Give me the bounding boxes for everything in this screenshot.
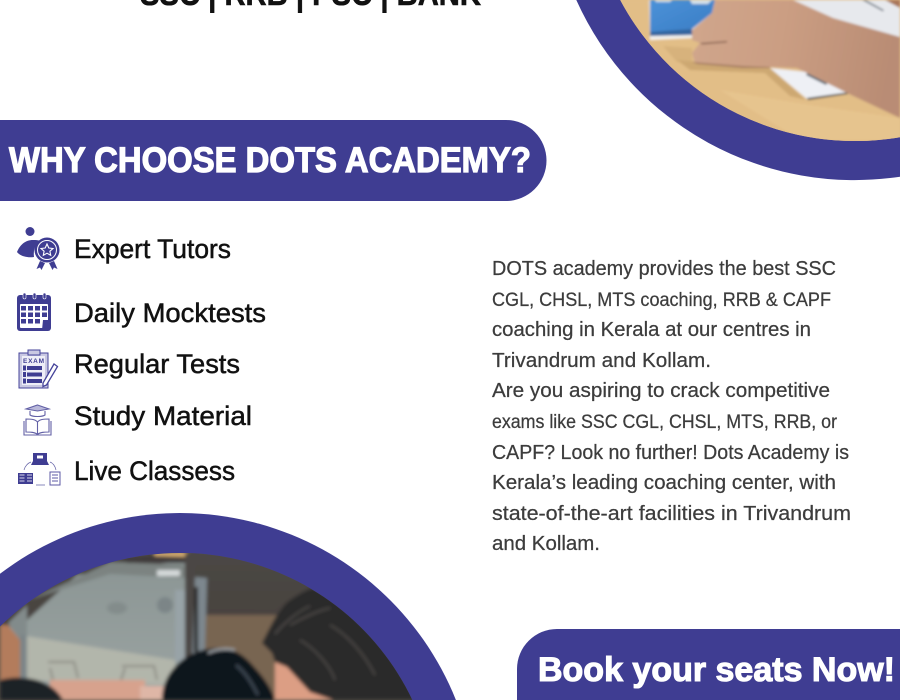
description paragraph: exams like SSC CGL, CHSL, MTS, RRB, or xyxy=(492,411,837,433)
description paragraph: DOTS academy provides the best SSC xyxy=(492,257,836,280)
icon: expert tutor badge xyxy=(17,227,60,270)
description paragraph: CAPF? Look no further! Dots Academy is xyxy=(492,441,849,464)
heading text: WHY CHOOSE DOTS ACADEMY? xyxy=(9,141,531,180)
description paragraph: coaching in Kerala at our centres in xyxy=(492,318,811,341)
label: Expert Tutors xyxy=(74,234,231,264)
description paragraph xyxy=(492,257,851,555)
icon: calendar xyxy=(17,293,51,331)
label: Daily Mocktests xyxy=(74,298,266,328)
description paragraph: Kerala’s leading coaching center, with xyxy=(492,471,836,494)
top-right circular photo with ring xyxy=(576,0,900,180)
description paragraph: and Kollam. xyxy=(492,532,600,555)
icon: exam sheet: EXAM xyxy=(23,358,44,365)
call to action button xyxy=(517,629,900,700)
icon: live classes network xyxy=(18,453,60,485)
description paragraph: Trivandrum and Kollam. xyxy=(492,349,711,372)
label: Study Material xyxy=(74,401,252,431)
description paragraph: state-of-the-art facilities in Trivandrum xyxy=(492,502,851,525)
description paragraph: Are you aspiring to crack competitive xyxy=(492,379,830,402)
icon: book and graduation cap xyxy=(24,405,51,435)
label: Live Classess xyxy=(74,456,235,486)
heading banner xyxy=(0,120,546,201)
bottom-left circular photo with ring xyxy=(0,513,456,700)
button text: Book your seats Now! xyxy=(538,651,895,689)
label: Regular Tests xyxy=(74,349,240,379)
icon: exam sheet xyxy=(19,350,58,388)
feature list xyxy=(17,227,266,486)
description paragraph: CGL, CHSL, MTS coaching, RRB & CAPF xyxy=(492,289,831,311)
